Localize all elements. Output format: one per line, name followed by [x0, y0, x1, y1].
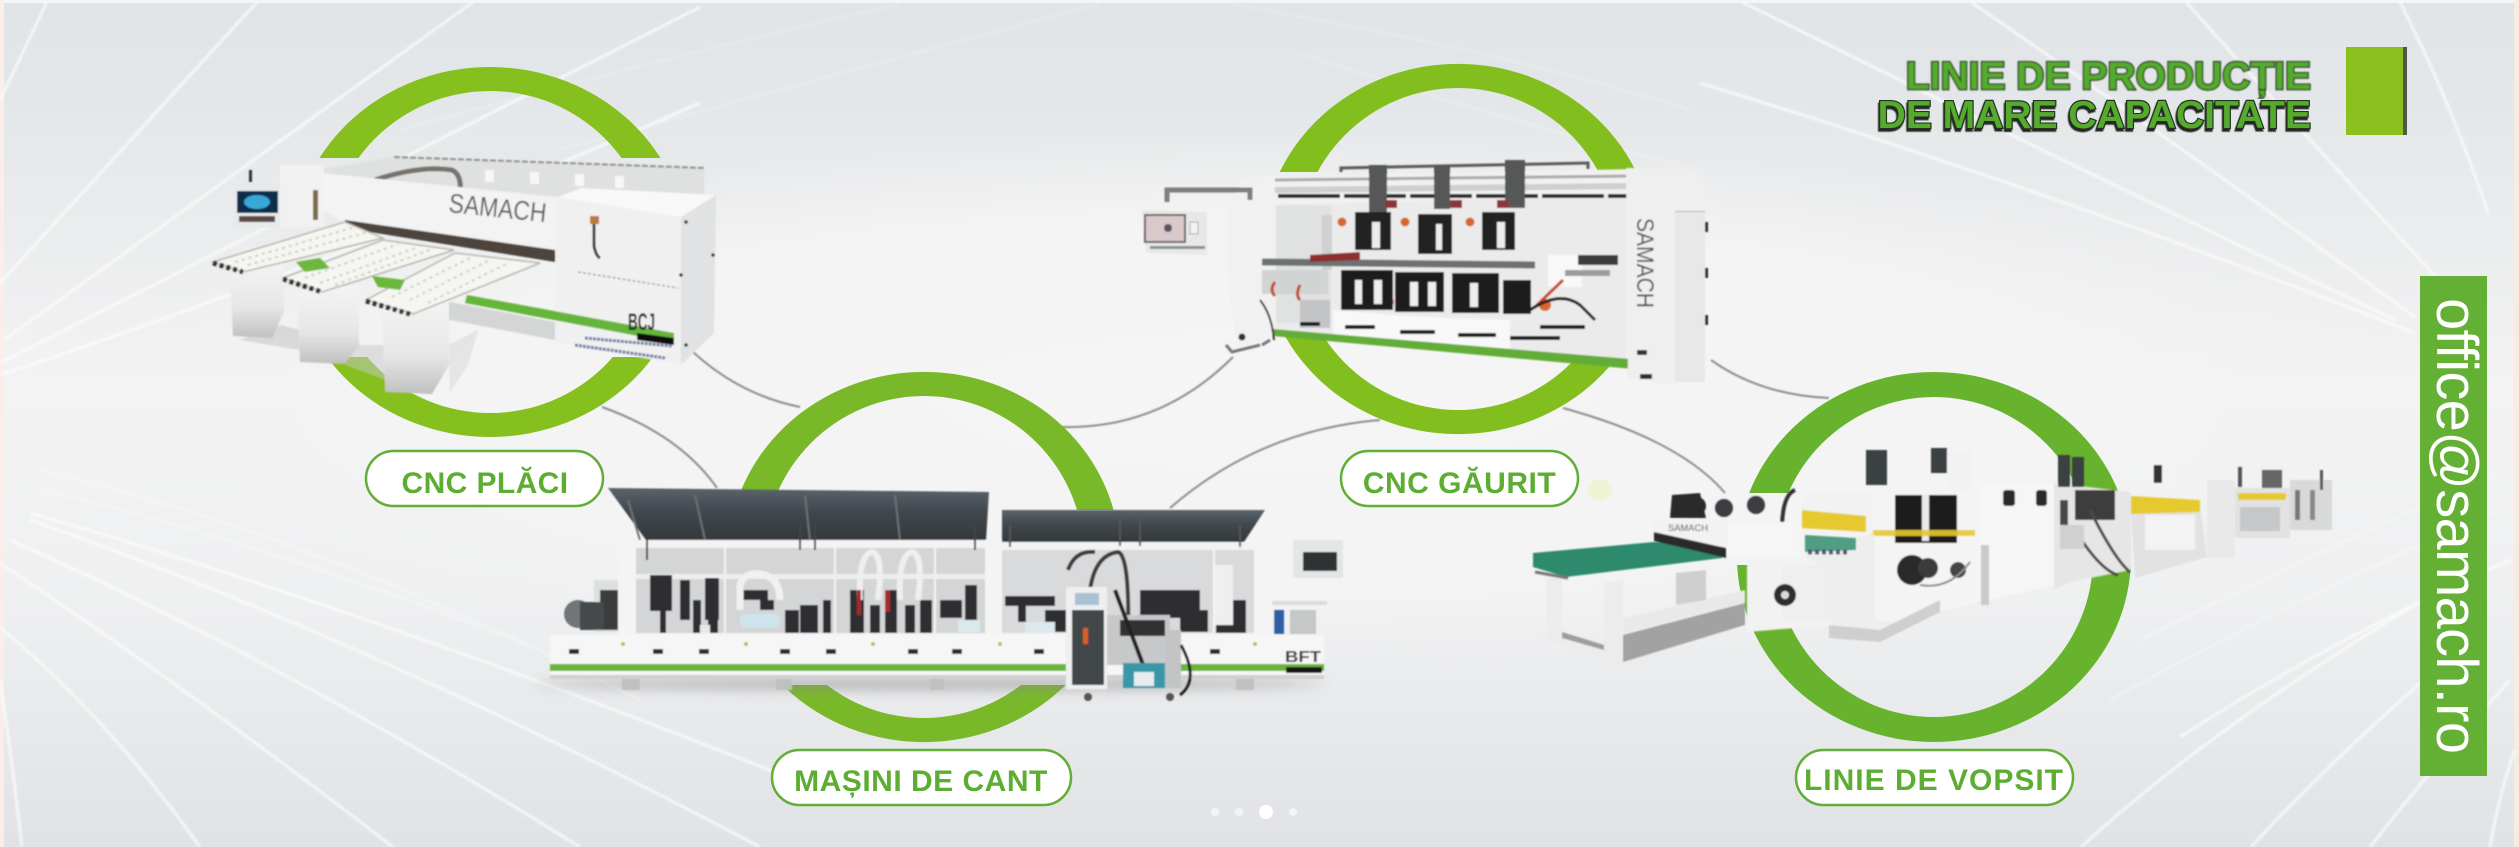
model text on edge bander: BFT — [1285, 649, 1321, 666]
logo text on coating head: SAMACH — [1668, 523, 1708, 533]
hood right — [1002, 510, 1265, 542]
label: linie de vopsit: LINIE DE VOPSIT — [1804, 764, 2064, 797]
machine: boring center — [1142, 160, 1708, 385]
operator screen — [1142, 190, 1250, 255]
logo text on boring center: SAMACH — [1631, 218, 1658, 308]
label: linie de vopsit — [1796, 750, 2073, 805]
soft glare spot — [1588, 479, 1612, 501]
machine: coating line — [1533, 448, 2332, 668]
far stations — [2131, 462, 2332, 578]
model text: BCJ — [628, 309, 655, 336]
email panel: office@samach.ro — [2424, 298, 2489, 754]
hood left — [608, 488, 989, 540]
glue unit — [1066, 552, 1190, 701]
title — [1878, 55, 2311, 137]
title accent bar — [2346, 47, 2407, 135]
label: CNC găurit: CNC GĂURIT — [1363, 466, 1556, 500]
lower body — [1805, 535, 1875, 625]
control panel — [1272, 540, 1343, 634]
ring: CNC plăci — [320, 67, 660, 437]
label: CNC plăci — [366, 451, 603, 506]
head and box — [1654, 518, 1728, 548]
ring: CNC găurit — [1262, 64, 1654, 434]
label: mașini de cant: MAȘINI DE CANT — [794, 765, 1048, 798]
monitor — [234, 170, 280, 228]
ring: linie de vopsit — [1737, 372, 2131, 742]
machine: panel saw — [213, 157, 716, 394]
machine: edge banding line — [535, 488, 1343, 701]
title: DE MARE CAPACITATE — [1878, 94, 2311, 137]
carousel dots — [1210, 805, 1297, 819]
label: mașini de cant — [772, 750, 1071, 805]
label: CNC găurit — [1341, 451, 1578, 506]
title: LINIE DE PRODUCȚIE — [1906, 55, 2311, 98]
ring: mașini de cant — [728, 372, 1120, 742]
feed conveyor — [1547, 576, 1623, 668]
motor — [564, 580, 618, 632]
machinery details — [650, 575, 1246, 633]
connector lines between machines — [602, 352, 1829, 508]
logo text on saw: SAMACH — [447, 188, 548, 228]
label: CNC plăci: CNC PLĂCI — [402, 466, 568, 500]
